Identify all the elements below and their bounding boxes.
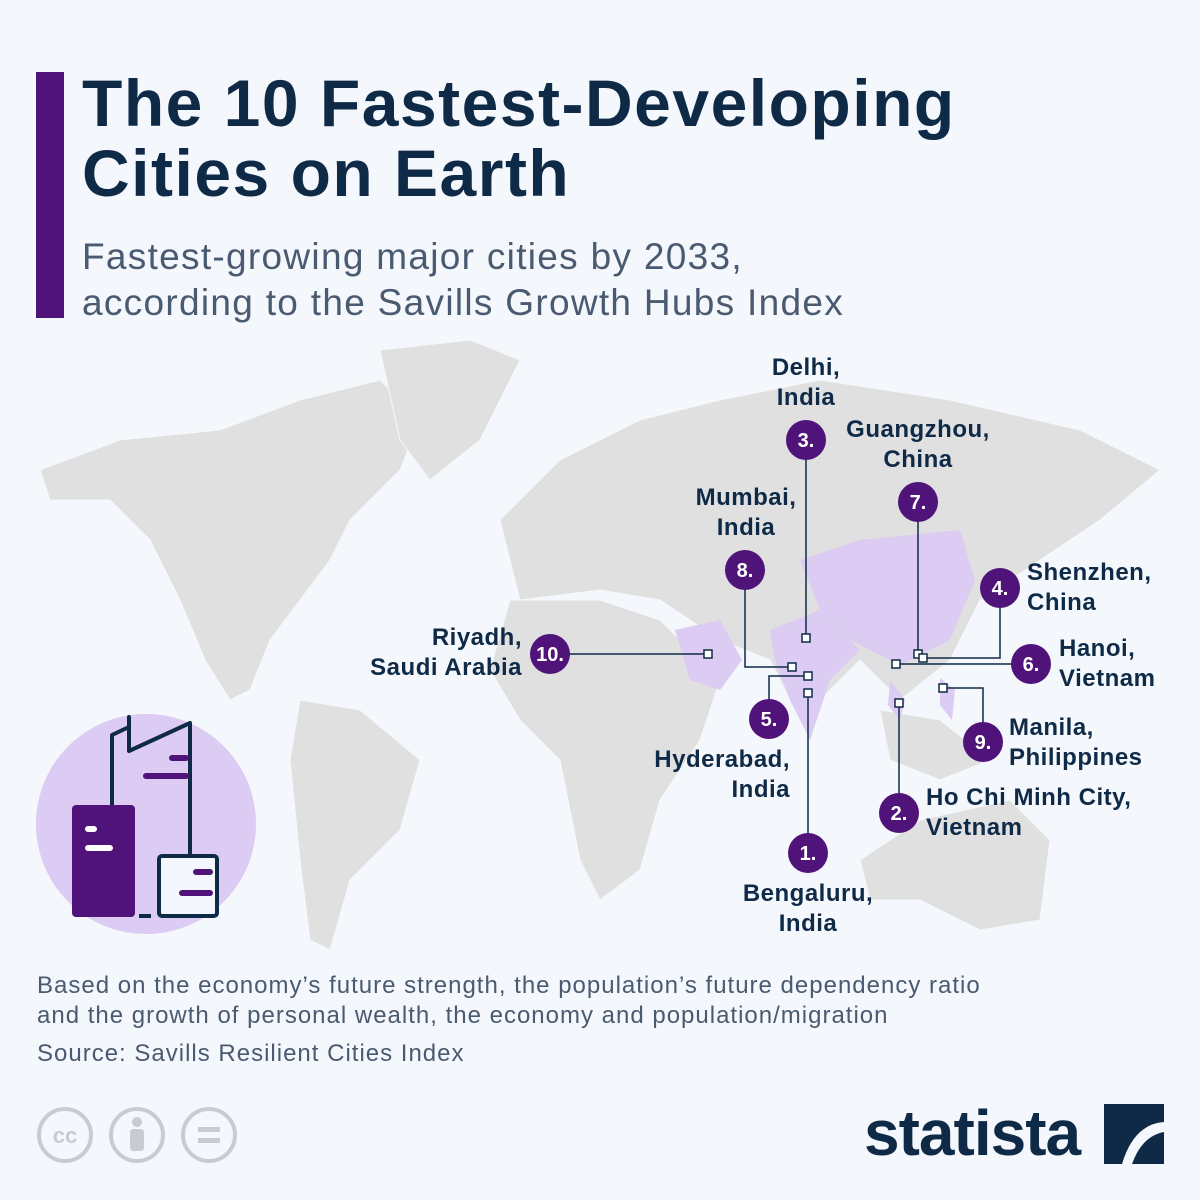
- footnote: Based on the economy’s future strength, the population’s future dependency ratio: [37, 972, 981, 999]
- world map: 9.: [975, 732, 991, 754]
- numbered markers: [530, 420, 1051, 873]
- title: The 10 Fastest-Developing: [82, 66, 956, 140]
- icon: buildings: [36, 714, 256, 934]
- text: India: [731, 776, 790, 803]
- text: Vietnam: [926, 814, 1022, 841]
- title: [82, 66, 956, 210]
- world map: 5.: [761, 709, 777, 731]
- world map: 1.: [800, 843, 816, 865]
- text: Guangzhou,: [846, 416, 990, 443]
- footnote: and the growth of personal wealth, the economy and population/migration: [37, 1002, 889, 1029]
- accent bar: [36, 72, 64, 318]
- world map: 6.: [1023, 654, 1039, 676]
- text: Philippines: [1009, 744, 1143, 771]
- subtitle: [82, 236, 844, 323]
- footnote: [37, 972, 981, 1029]
- connector lines: [550, 440, 1031, 853]
- city labels: India: [777, 384, 835, 411]
- world map: 7.: [910, 492, 926, 514]
- license icons: cc: [53, 1123, 77, 1148]
- subtitle: Fastest-growing major cities by 2033,: [82, 236, 743, 277]
- text: China: [1027, 589, 1096, 616]
- title: Cities on Earth: [82, 136, 570, 210]
- text: China: [883, 446, 953, 473]
- text: Riyadh,: [432, 624, 522, 651]
- text: Vietnam: [1059, 665, 1155, 692]
- text: Bengaluru,: [743, 880, 873, 907]
- text: Hanoi,: [1059, 635, 1135, 662]
- license icons: [37, 1107, 237, 1163]
- subtitle: according to the Savills Growth Hubs Index: [82, 282, 844, 323]
- world map: 10.: [536, 644, 564, 666]
- city labels: [772, 354, 840, 411]
- text: Mumbai,: [696, 484, 796, 511]
- text: India: [717, 514, 775, 541]
- world map: 3.: [798, 430, 814, 452]
- text: Shenzhen,: [1027, 559, 1152, 586]
- source: Source: Savills Resilient Cities Index: [37, 1040, 464, 1067]
- text: Saudi Arabia: [370, 654, 522, 681]
- world map: 4.: [992, 578, 1008, 600]
- text: Hyderabad,: [654, 746, 790, 773]
- text: Ho Chi Minh City,: [926, 784, 1131, 811]
- statista logo: statista: [864, 1097, 1080, 1169]
- text: India: [779, 910, 837, 937]
- city labels: Delhi,: [772, 354, 840, 381]
- world map: 2.: [891, 803, 907, 825]
- world map: 8.: [737, 560, 753, 582]
- text: Manila,: [1009, 714, 1094, 741]
